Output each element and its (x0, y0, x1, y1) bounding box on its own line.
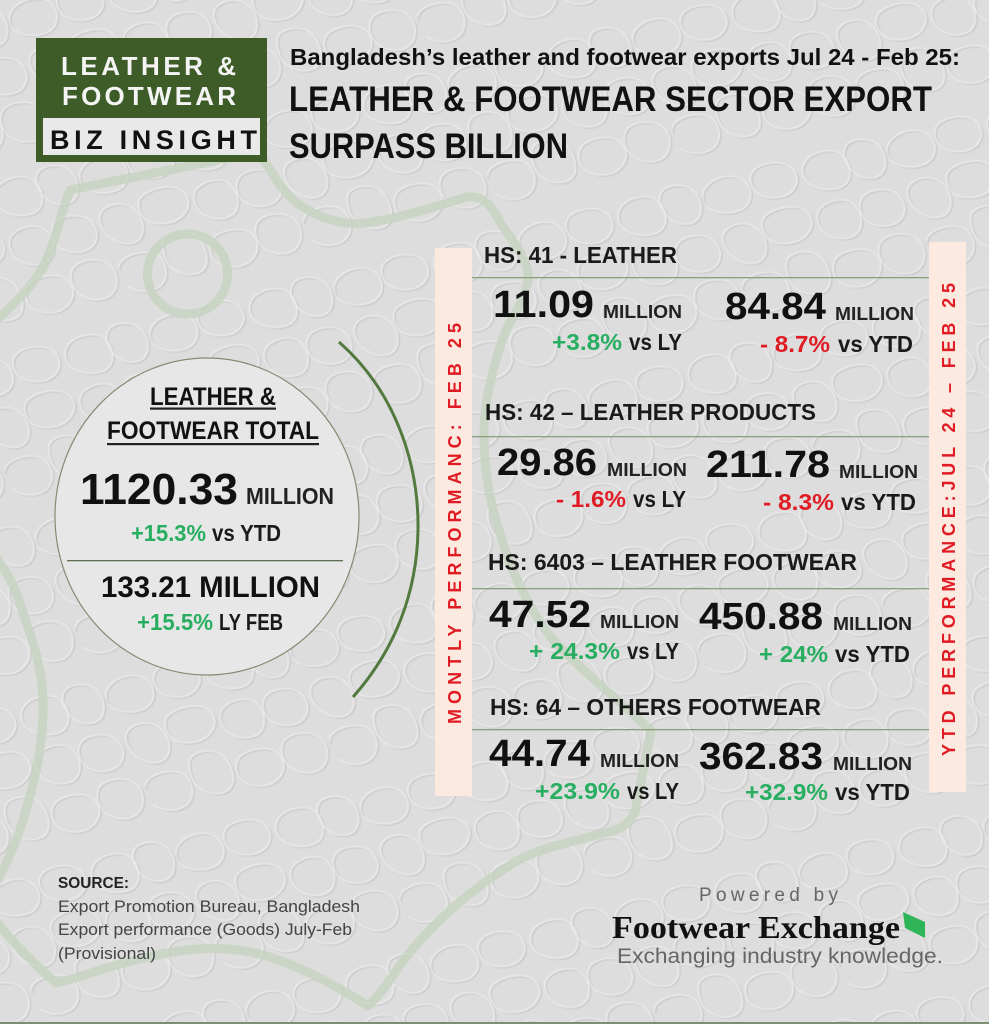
section: HS 64 others footwear: HS: 64 – OTHERS FOOTWEAR (490, 694, 821, 720)
section: HS 41 leather: 84.84 (725, 286, 826, 328)
section: HS 6403 leather footwear: 47.52 (489, 594, 591, 636)
section: HS 41 leather: vs YTD (838, 331, 913, 357)
section: HS 64 others footwear: vs LY (627, 778, 679, 804)
total circle panel: 1120.33 (80, 465, 238, 514)
section: HS 41 leather: vs LY (629, 329, 682, 355)
section: HS 6403 leather footwear (472, 549, 929, 667)
curved arc connector (339, 342, 418, 697)
logo: Leather & Footwear Biz Insight: FOOTWEAR (62, 81, 236, 111)
section: HS 6403 leather footwear: + 24% (759, 641, 828, 667)
section: HS 64 others footwear: +23.9% (535, 778, 620, 804)
logo: Leather & Footwear Biz Insight: LEATHER & (61, 51, 236, 81)
section: HS 42 leather products: 211.78 (706, 444, 830, 486)
section: HS 64 others footwear: vs YTD (835, 779, 910, 805)
section: HS 64 others footwear: +32.9% (745, 779, 828, 805)
section: HS 42 leather products: - 1.6% (556, 486, 626, 512)
band: YTD performance (929, 242, 966, 792)
section: HS 6403 leather footwear: vs YTD (835, 641, 910, 667)
source note: Export Promotion Bureau, Bangladesh (58, 898, 360, 916)
total circle panel: 133.21 MILLION (101, 571, 320, 604)
section: HS 64 others footwear: 44.74 (489, 733, 590, 775)
source note: Export performance (Goods) July-Feb (58, 921, 352, 939)
section: HS 41 leather: +3.8% (552, 329, 622, 355)
total circle panel: vs YTD (212, 520, 281, 546)
band: monthly performance: MONTLY PERFORMANC: FEB 25 (445, 323, 465, 724)
section: HS 42 leather products: 29.86 (497, 442, 597, 484)
section: HS 42 leather products (472, 399, 929, 515)
powered by brand block: Footwear Exchange (612, 909, 900, 945)
section: HS 42 leather products: vs LY (633, 486, 686, 512)
section: HS 41 leather: 11.09 (493, 284, 594, 326)
section: HS 42 leather products: MILLION (839, 462, 918, 482)
section: HS 6403 leather footwear: vs LY (627, 638, 679, 664)
section: HS 6403 leather footwear: + 24.3% (529, 638, 620, 664)
section: HS 64 others footwear: MILLION (600, 751, 679, 771)
ring hole in hide (148, 234, 228, 314)
total circle panel: FOOTWEAR TOTAL (107, 417, 319, 445)
band: monthly performance (435, 248, 472, 796)
section: HS 64 others footwear (472, 694, 929, 805)
section: HS 41 leather (472, 242, 929, 357)
section: HS 41 leather: MILLION (835, 304, 914, 324)
logo: Leather & Footwear Biz Insight: BIZ INSIGHT (50, 125, 258, 155)
section: HS 42 leather products: MILLION (607, 460, 687, 480)
section: HS 42 leather products: vs YTD (841, 489, 916, 515)
total circle panel: +15.3% (131, 520, 206, 546)
logo: Leather & Footwear Biz Insight (36, 38, 267, 162)
total circle panel: LY FEB (219, 609, 283, 635)
total circle panel: MILLION (246, 483, 334, 509)
source note (58, 875, 360, 963)
icon: green leaf mark (903, 912, 925, 938)
section: HS 42 leather products: HS: 42 – LEATHER PRODUCTS (485, 399, 816, 425)
leather hide outline (0, 152, 651, 1006)
title block: Bangladesh’s leather and footwear exports Jul 24 - Feb 25: (290, 44, 960, 70)
section: HS 42 leather products: - 8.3% (763, 489, 834, 515)
total circle panel (55, 358, 359, 675)
powered by brand block (612, 885, 943, 968)
section: HS 64 others footwear: MILLION (833, 754, 912, 774)
total circle panel: +15.5% (137, 609, 213, 635)
section: HS 6403 leather footwear: 450.88 (699, 596, 823, 638)
band: YTD performance: YTD PERFORMANCE:JUL 24 – FEB 25 (939, 283, 959, 756)
section: HS 41 leather: MILLION (603, 302, 682, 322)
title block (289, 44, 960, 166)
section: HS 6403 leather footwear: MILLION (833, 614, 912, 634)
powered by brand block: Exchanging industry knowledge. (617, 944, 943, 968)
section: HS 41 leather: HS: 41 - LEATHER (484, 242, 677, 268)
powered by brand block: Powered by (699, 885, 838, 906)
source note: SOURCE: (58, 875, 129, 892)
title block: SURPASS BILLION (289, 127, 568, 166)
section: HS 64 others footwear: 362.83 (699, 736, 823, 778)
source note: (Provisional) (58, 945, 156, 963)
title block: LEATHER & FOOTWEAR SECTOR EXPORT (289, 80, 932, 119)
section: HS 6403 leather footwear: HS: 6403 – LEATHER FOOTWEAR (488, 549, 857, 575)
section: HS 6403 leather footwear: MILLION (600, 612, 679, 632)
total circle panel: LEATHER & (150, 383, 276, 411)
section: HS 41 leather: - 8.7% (760, 331, 830, 357)
